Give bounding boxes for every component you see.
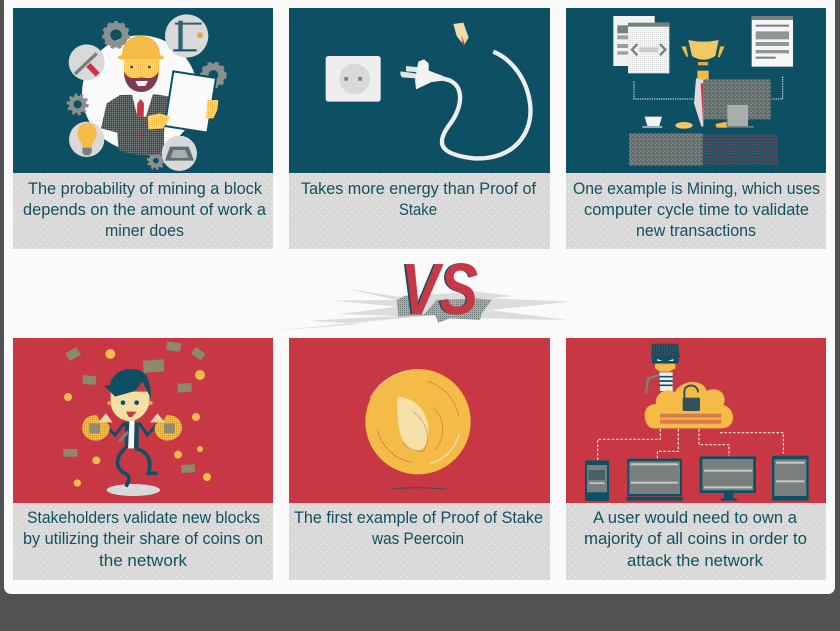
illustration background: [289, 8, 550, 173]
caption: The first example of Proof of Stake: [294, 509, 543, 527]
caption: [289, 173, 550, 249]
caption: A user would need to own a: [593, 509, 797, 527]
caption: the network: [99, 552, 188, 570]
caption: [566, 503, 826, 580]
caption: Takes more energy than Proof of: [301, 180, 536, 198]
panel: probability of mining: [13, 8, 273, 249]
illustration background: [566, 338, 826, 503]
caption: computer cycle time to validate: [584, 201, 809, 219]
panel: peercoin: [289, 338, 550, 580]
illustration background: [566, 8, 826, 173]
illustration background: [289, 338, 550, 503]
panel: network attack: [566, 338, 826, 580]
VS lettering: VS: [401, 250, 478, 330]
panel: energy use: [289, 8, 550, 249]
illustration background: [13, 338, 273, 503]
caption: depends on the amount of work a: [23, 201, 266, 219]
icon: socket and plug: [326, 23, 530, 158]
caption: [13, 503, 273, 580]
panel: mining example: [566, 8, 826, 249]
icon: miner engineer: [68, 14, 225, 171]
caption: The probability of mining a block: [28, 180, 263, 198]
caption: was Peercoin: [371, 530, 464, 548]
versus emblem: [265, 250, 572, 332]
icon: peercoin: [365, 369, 471, 489]
icon: man with money bags: [63, 341, 211, 496]
caption: miner does: [105, 222, 184, 240]
caption: [566, 173, 826, 249]
caption: Stake: [399, 201, 437, 219]
caption: new transactions: [636, 222, 756, 240]
icon: person at computer: [613, 16, 793, 166]
cracked ground: [265, 288, 572, 332]
icon: thief, cloud and devices: [585, 344, 809, 501]
caption: Stakeholders validate new blocks: [27, 509, 260, 527]
caption: [289, 503, 550, 580]
caption: One example is Mining, which uses: [573, 180, 820, 198]
panel: stakeholders: [13, 338, 273, 580]
VS lettering: VS: [399, 250, 477, 330]
caption: majority of all coins in order to: [584, 530, 807, 548]
illustration background: [13, 8, 273, 173]
caption: by utilizing their share of coins on: [23, 530, 263, 548]
caption: attack the network: [627, 552, 764, 570]
caption: [13, 173, 273, 249]
